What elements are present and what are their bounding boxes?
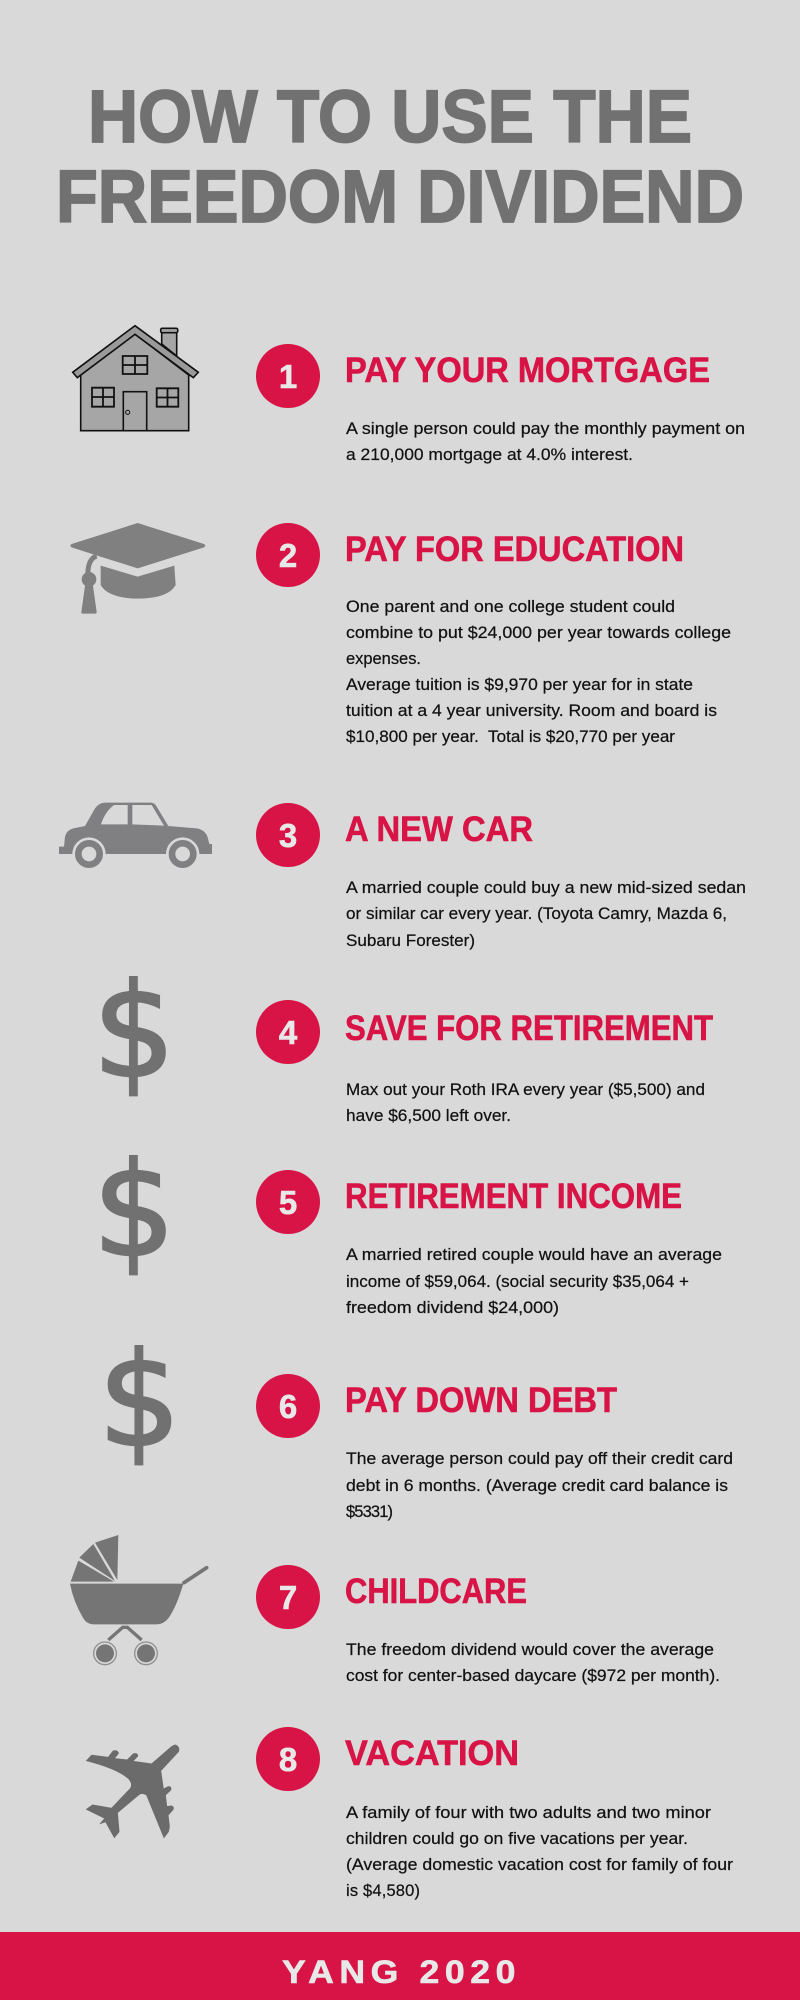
heading: A NEW CAR <box>345 810 533 849</box>
body text: freedom dividend $24,000) <box>346 1299 559 1317</box>
body text <box>346 1246 722 1317</box>
number badge 1: 1 <box>279 358 297 395</box>
body text: $10,800 per year. Total is $20,770 per year <box>346 728 676 746</box>
number badge 8: 8 <box>279 1741 297 1778</box>
title <box>56 75 744 238</box>
panel: 6 pay down debt <box>98 1324 733 1521</box>
title: HOW TO USE THE <box>88 75 692 158</box>
heading: SAVE FOR RETIREMENT <box>345 1009 713 1048</box>
body text <box>346 1081 705 1125</box>
icon: baby stroller <box>70 1535 207 1665</box>
title: FREEDOM DIVIDEND <box>56 155 744 238</box>
number badge 6: 6 <box>279 1388 297 1425</box>
body text: $5331) <box>346 1503 393 1521</box>
body text: combine to put $24,000 per year towards college <box>346 624 731 642</box>
number badge 6 <box>256 1374 320 1438</box>
panel: 4 save for retirement <box>93 955 713 1125</box>
panel: 5 retirement income <box>93 1134 722 1317</box>
icon: dollar sign: $ <box>93 1134 175 1286</box>
footer text: YANG 2020 <box>282 1954 521 1990</box>
body text: is $4,580) <box>346 1882 420 1900</box>
body text: cost for center-based daycare ($972 per month). <box>346 1667 720 1685</box>
panel: 7 childcare <box>70 1535 720 1685</box>
heading: RETIREMENT INCOME <box>345 1177 682 1216</box>
body text: The freedom dividend would cover the average <box>346 1641 714 1659</box>
number badge 3: 3 <box>279 817 297 854</box>
body text <box>346 1641 720 1685</box>
body text: (Average domestic vacation cost for family of four <box>346 1856 734 1874</box>
number badge 1 <box>256 344 320 408</box>
icon: airplane <box>87 1745 179 1837</box>
body text: A married couple could buy a new mid-sized sedan <box>346 879 746 897</box>
panel: 2 pay for education <box>70 523 731 746</box>
icon: car <box>53 803 220 871</box>
body text: tuition at a 4 year university. Room and board is <box>346 702 717 720</box>
number badge 4 <box>256 1000 320 1064</box>
body text: have $6,500 left over. <box>346 1107 511 1125</box>
body text: Max out your Roth IRA every year ($5,500) and <box>346 1081 705 1099</box>
number badge 5 <box>256 1170 320 1234</box>
footer banner <box>0 1932 800 2000</box>
body text: Subaru Forester) <box>346 932 475 950</box>
panel: 1 pay your mortgage <box>73 326 745 464</box>
body text: expenses. <box>346 650 421 668</box>
body text: debt in 6 months. (Average credit card balance is <box>346 1477 728 1495</box>
number badge 3 <box>256 803 320 867</box>
number badge 2: 2 <box>279 537 297 574</box>
heading: CHILDCARE <box>345 1572 527 1611</box>
body text: A single person could pay the monthly payment on <box>346 420 745 438</box>
number badge 2 <box>256 523 320 587</box>
icon: graduation cap <box>70 523 205 614</box>
icon: house <box>73 326 198 431</box>
panel: 3 a new car <box>53 803 746 950</box>
body text <box>346 1804 734 1900</box>
number badge 7 <box>256 1565 320 1629</box>
heading: VACATION <box>345 1734 519 1773</box>
heading: PAY DOWN DEBT <box>345 1381 617 1420</box>
body text: Average tuition is $9,970 per year for in state <box>346 676 693 694</box>
body text: children could go on five vacations per year. <box>346 1830 688 1848</box>
body text: One parent and one college student could <box>346 598 675 616</box>
body text <box>346 598 731 746</box>
body text: a 210,000 mortgage at 4.0% interest. <box>346 446 633 464</box>
panel: 8 vacation <box>87 1727 734 1900</box>
heading: PAY FOR EDUCATION <box>345 530 684 569</box>
body text <box>346 879 746 950</box>
heading: PAY YOUR MORTGAGE <box>345 351 710 390</box>
body text: The average person could pay off their credit card <box>346 1450 733 1468</box>
number badge 8 <box>256 1727 320 1791</box>
body text <box>346 420 745 464</box>
body text: A married retired couple would have an average <box>346 1246 722 1264</box>
body text: A family of four with two adults and two minor <box>346 1804 712 1822</box>
icon: dollar sign: $ <box>98 1324 181 1476</box>
body text: or similar car every year. (Toyota Camry, Mazda 6, <box>346 905 727 923</box>
body text: income of $59,064. (social security $35,064 + <box>346 1273 689 1291</box>
number badge 5: 5 <box>279 1184 297 1221</box>
number badge 4: 4 <box>279 1014 298 1051</box>
icon: dollar sign: $ <box>93 955 175 1107</box>
number badge 7: 7 <box>279 1579 297 1616</box>
body text <box>346 1450 733 1521</box>
